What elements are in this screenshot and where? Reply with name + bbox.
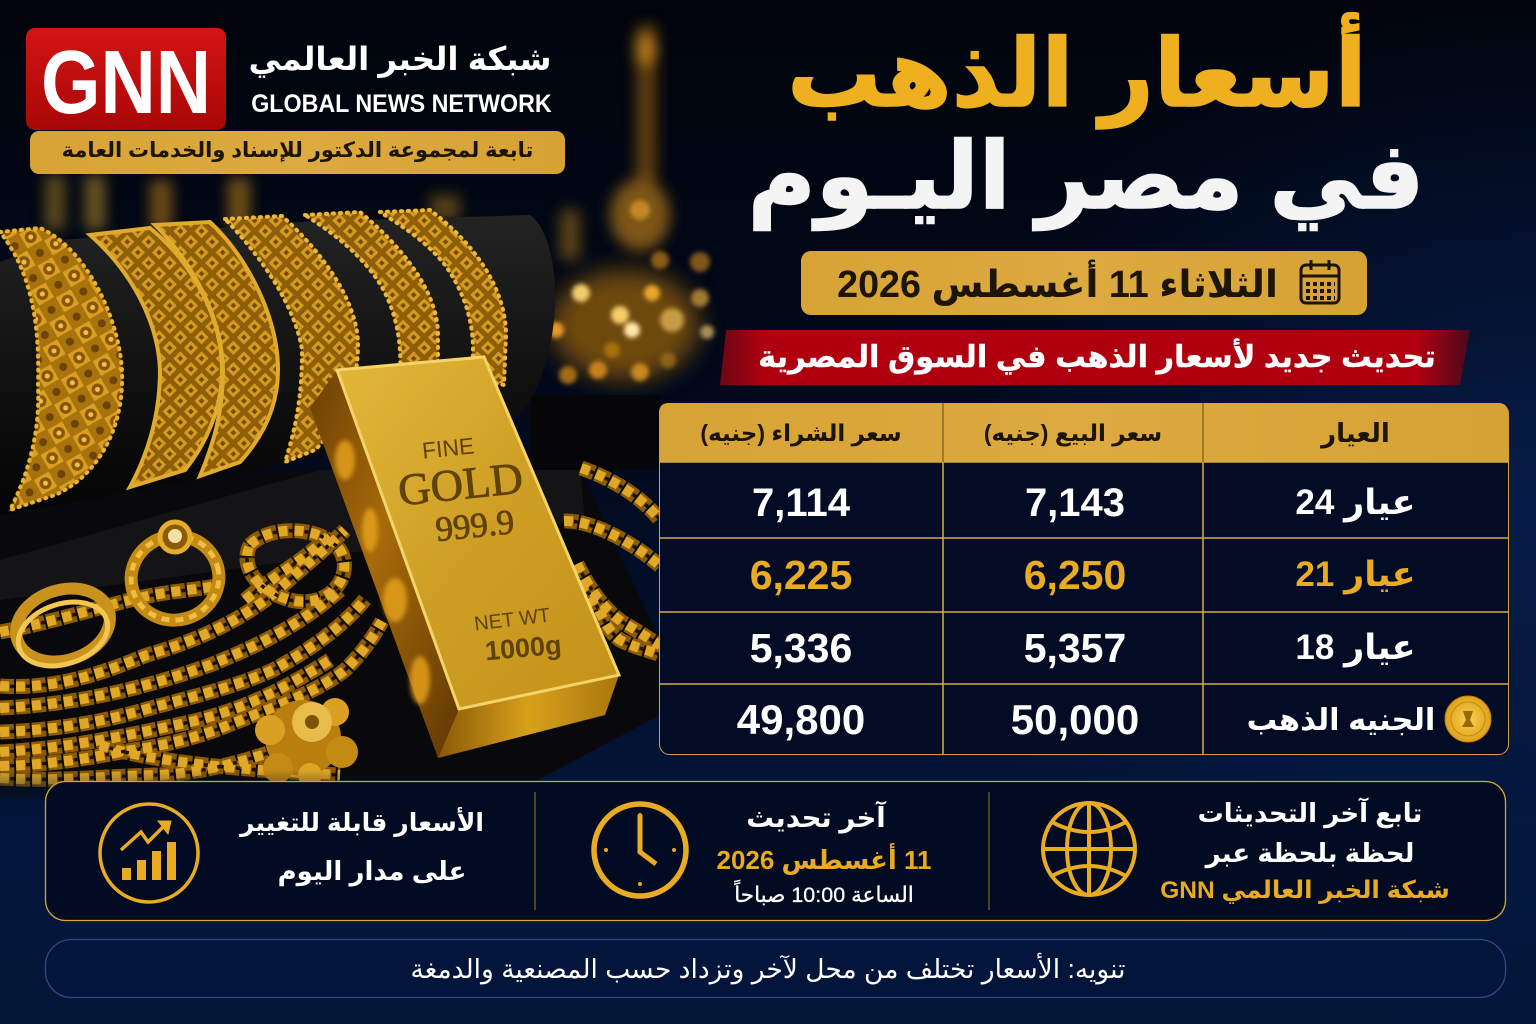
affiliation strip text: تابعة لمجموعة الدكتور للإسناد والخدمات العامة bbox=[62, 139, 533, 162]
disclaimer pill background bbox=[46, 940, 1506, 998]
table row pound bbox=[737, 696, 1435, 743]
table row 18 bbox=[750, 625, 1416, 671]
gold bar: NET WT bbox=[473, 604, 551, 636]
table row 24: عيار 24 bbox=[1295, 483, 1416, 522]
icon: rising chart bbox=[100, 804, 198, 902]
gold chains bbox=[0, 468, 660, 779]
icon: globe bbox=[1043, 803, 1135, 895]
icon: gold coin bbox=[1445, 696, 1491, 742]
table row 21 bbox=[750, 552, 1416, 598]
info: follow updates: لحظة بلحظة عبر bbox=[1206, 838, 1414, 868]
gold bar: FINE bbox=[421, 432, 476, 464]
disclaimer text: تنويه: الأسعار تختلف من محل لآخر وتزداد حسب المصنعية والدمغة bbox=[410, 954, 1126, 984]
info: last update: الساعة 10:00 صباحاً bbox=[734, 883, 914, 907]
pendant bbox=[255, 698, 358, 787]
icon: clock bbox=[594, 804, 686, 896]
info panel background bbox=[46, 782, 1506, 920]
table headers: سعر الشراء (جنيه) bbox=[700, 420, 902, 446]
title line 2: في مصر اليـوم bbox=[748, 124, 1424, 228]
red ribbon background bbox=[720, 330, 1470, 385]
network name english: GLOBAL NEWS NETWORK bbox=[251, 90, 552, 118]
table headers bbox=[700, 418, 1390, 448]
bangles bbox=[0, 210, 506, 510]
table row pound: الجنيه الذهب bbox=[1247, 703, 1435, 737]
icon: calendar bbox=[1301, 260, 1339, 303]
info: follow updates bbox=[1160, 797, 1450, 904]
table headers: سعر البيع (جنيه) bbox=[984, 420, 1162, 446]
info: last update bbox=[716, 800, 932, 907]
blurred lights background bbox=[45, 25, 714, 470]
gold rings bbox=[7, 522, 228, 677]
logo box bbox=[26, 28, 226, 130]
dark table surface bbox=[0, 470, 660, 800]
table row pound: 50,000 bbox=[1011, 696, 1139, 743]
table row 18: 5,357 bbox=[1024, 625, 1126, 671]
table row pound: 49,800 bbox=[737, 696, 865, 743]
info: prices may change: الأسعار قابلة للتغيير bbox=[240, 809, 484, 837]
table row 18: عيار 18 bbox=[1295, 628, 1416, 667]
info: follow updates: شبكة الخبر العالمي GNN bbox=[1160, 877, 1450, 904]
info: follow updates: تابع آخر التحديثات bbox=[1198, 798, 1422, 828]
title line 1: أسعار الذهب bbox=[787, 21, 1367, 126]
table row 18: 5,336 bbox=[750, 625, 852, 671]
table row 24: 7,114 bbox=[752, 481, 850, 525]
velvet display roller bbox=[0, 215, 555, 515]
update ribbon text: تحديث جديد لأسعار الذهب في السوق المصرية bbox=[758, 340, 1436, 374]
info: last update: آخر تحديث bbox=[746, 802, 886, 833]
date pill background bbox=[801, 251, 1367, 315]
date text: الثلاثاء 11 أغسطس 2026 bbox=[837, 263, 1278, 305]
price table grid bbox=[659, 403, 1508, 755]
gold bar bbox=[310, 357, 619, 758]
info: prices may change bbox=[238, 807, 484, 886]
table row 24 bbox=[752, 481, 1416, 525]
table row 24: 7,143 bbox=[1025, 481, 1125, 525]
table row 21: 6,250 bbox=[1024, 552, 1126, 598]
info: last update: 11 أغسطس 2026 bbox=[716, 845, 932, 875]
table row 21: 6,225 bbox=[750, 552, 852, 598]
logo text GNN: GNN bbox=[41, 33, 211, 133]
affiliation strip background bbox=[30, 131, 565, 174]
info: prices may change: على مدار اليوم bbox=[278, 856, 466, 886]
network name arabic: شبكة الخبر العالمي bbox=[249, 41, 551, 77]
gold bar: 999.9 bbox=[434, 502, 516, 549]
gold bar: GOLD bbox=[396, 453, 525, 515]
gold bar: 1000g bbox=[484, 630, 563, 666]
table headers: العيار bbox=[1321, 418, 1390, 448]
table row 21: عيار 21 bbox=[1295, 555, 1416, 594]
